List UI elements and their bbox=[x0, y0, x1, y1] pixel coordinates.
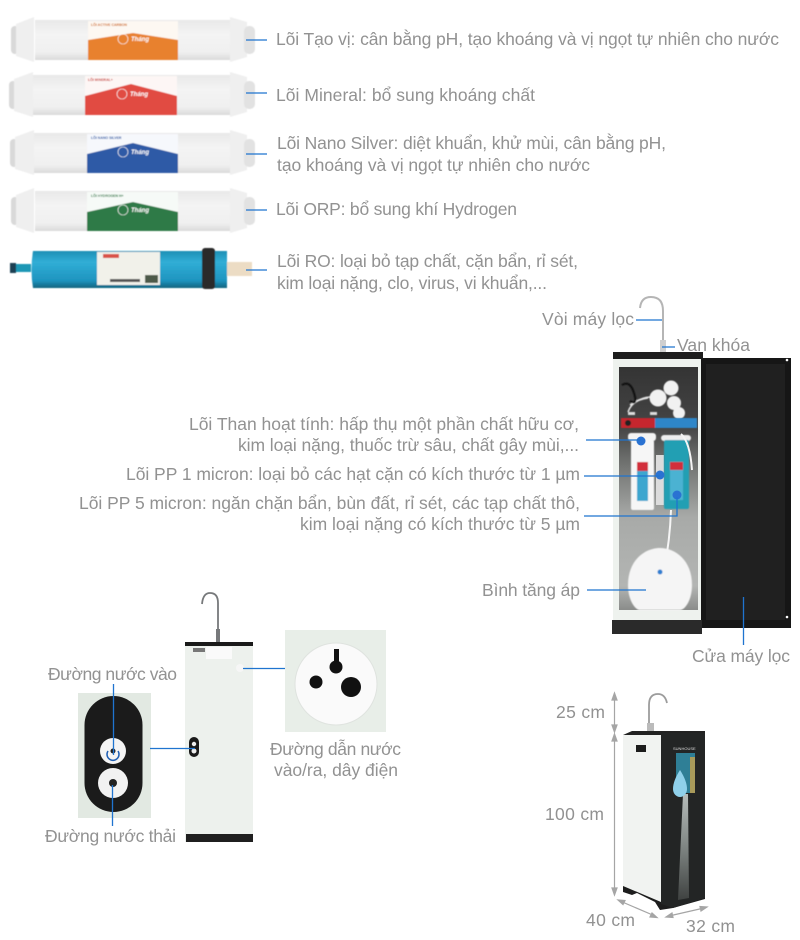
filter cartridge: Nano Silver: LÕI NANO SILVER bbox=[91, 135, 122, 140]
water port bbox=[189, 737, 199, 757]
label: Lõi Than hoạt tính: kim loại nặng, thuốc trừ sâu, chất gây mùi,... bbox=[238, 435, 579, 455]
label: Đường nước thải: Đường nước thải bbox=[45, 826, 176, 846]
filter cartridge: Tạo vị: Tháng bbox=[131, 37, 149, 43]
filter cartridge: Mineral bbox=[9, 72, 255, 117]
label: Lõi PP 1 micron: Lõi PP 1 micron: loại bỏ các hạt cặn có kích thước từ 1 µm bbox=[126, 464, 580, 484]
label: 32 cm: 32 cm bbox=[686, 916, 735, 936]
label: Cửa máy lọc: Cửa máy lọc bbox=[692, 646, 790, 666]
back view purifier bbox=[185, 593, 253, 842]
label: Lõi Than hoạt tính: Lõi Than hoạt tính: hấp thụ một phần chất hữu cơ, bbox=[189, 414, 579, 434]
label: Lõi PP 5 micron: kim loại nặng có kích thước từ 5 µm bbox=[300, 514, 580, 534]
filter cartridge: Nano Silver bbox=[10, 130, 255, 175]
leader lines: top filters bbox=[246, 40, 267, 270]
label: Vòi máy lọc: Vòi máy lọc bbox=[542, 309, 634, 329]
logo band bbox=[621, 418, 697, 428]
arrow: 25 cm bbox=[612, 693, 617, 732]
top bbox=[623, 731, 705, 735]
cabinet body bbox=[612, 352, 703, 634]
bottom bar bbox=[186, 834, 253, 842]
teal filter housing bbox=[661, 435, 691, 509]
label: Lõi RO: kim loại nặng, clo, virus, vi khuẩn,... bbox=[277, 273, 547, 293]
top membranes bbox=[622, 380, 685, 419]
label: Bình tăng áp: Bình tăng áp bbox=[482, 580, 580, 600]
label: Đường dẫn nước: Đường dẫn nước bbox=[270, 738, 401, 759]
icon: faucet bbox=[647, 694, 667, 732]
pressure tank bbox=[628, 548, 692, 610]
front panel bbox=[661, 733, 705, 908]
inset: round hole plate bbox=[285, 630, 386, 732]
label: Lõi Nano Silver: Lõi Nano Silver: diệt khuẩn, khử mùi, cân bằng pH, bbox=[277, 132, 666, 153]
filter cartridge: Tạo vị bbox=[11, 17, 255, 62]
callout dots bbox=[636, 436, 682, 500]
sticker bbox=[193, 647, 232, 659]
label: Lõi PP 5 micron bbox=[79, 493, 580, 534]
label: Lõi Tạo vị: Lõi Tạo vị: cân bằng pH, tạo khoáng và vị ngọt tự nhiên cho nước bbox=[276, 28, 779, 49]
RO membrane bbox=[10, 248, 252, 289]
front panel: SUNHOUSE bbox=[673, 746, 696, 751]
filter cartridge: ORP: Tháng bbox=[131, 208, 149, 214]
door bbox=[701, 358, 791, 628]
label: Lõi Nano Silver bbox=[277, 132, 666, 175]
inset: water ports bbox=[78, 693, 151, 818]
filter cartridge: ORP bbox=[11, 188, 255, 233]
icon: faucet bbox=[202, 593, 218, 632]
leader lines: back view bbox=[112, 668, 285, 826]
filter cartridge: ORP: LÕI HYDROGEN H+ bbox=[91, 193, 124, 198]
label: Lõi Mineral: Lõi Mineral: bổ sung khoáng chất bbox=[276, 85, 535, 105]
dimension arrows bbox=[612, 693, 707, 918]
open water purifier bbox=[612, 297, 791, 634]
filter cartridge: Nano Silver: Tháng bbox=[131, 150, 149, 156]
filter cartridge: Mineral: LÕI MINERAL+ bbox=[88, 77, 113, 82]
back filter housing bbox=[656, 455, 664, 505]
body bbox=[185, 642, 253, 842]
label: Lõi RO: Lõi RO: loại bỏ tạp chất, cặn bẩn, rỉ sét, bbox=[277, 251, 578, 271]
side panel bbox=[623, 735, 661, 902]
label: Lõi Nano Silver: tạo khoáng và vị ngọt tự nhiên cho nước bbox=[277, 155, 590, 175]
label: 25 cm: 25 cm bbox=[556, 702, 605, 722]
leader lines: open purifier bbox=[584, 320, 744, 645]
top bar bbox=[185, 642, 253, 646]
tube bbox=[664, 434, 692, 570]
label: Đường dẫn nước bbox=[270, 738, 401, 780]
icon: faucet bbox=[640, 297, 666, 352]
label: Lõi ORP: Lõi ORP: bổ sung khí Hydrogen bbox=[276, 199, 517, 219]
base bbox=[623, 884, 705, 910]
product with dimensions bbox=[623, 694, 705, 910]
label: Đường nước vào: Đường nước vào bbox=[48, 664, 177, 684]
label: Lõi RO bbox=[277, 251, 578, 293]
label: Lõi Than hoạt tính bbox=[189, 414, 579, 455]
label: Van khóa: Van khóa bbox=[677, 335, 750, 355]
filter cartridge: Tạo vị: LÕI ACTIVE CARBON bbox=[91, 22, 127, 27]
arrow: 32 cm bbox=[666, 906, 707, 918]
arrow: 40 cm bbox=[618, 900, 657, 918]
hole plate bbox=[236, 664, 244, 672]
label: Lõi PP 5 micron: Lõi PP 5 micron: ngăn chặn bẩn, bùn đất, rỉ sét, các tạp chất thô, bbox=[79, 493, 580, 513]
white filter housing bbox=[628, 433, 656, 510]
label: Đường dẫn nước: vào/ra, dây điện bbox=[274, 760, 398, 780]
label: 40 cm: 40 cm bbox=[586, 910, 635, 930]
arrow: 100 cm bbox=[612, 734, 617, 895]
label: 100 cm: 100 cm bbox=[545, 804, 604, 824]
filter cartridge: Mineral: Tháng bbox=[130, 92, 148, 98]
